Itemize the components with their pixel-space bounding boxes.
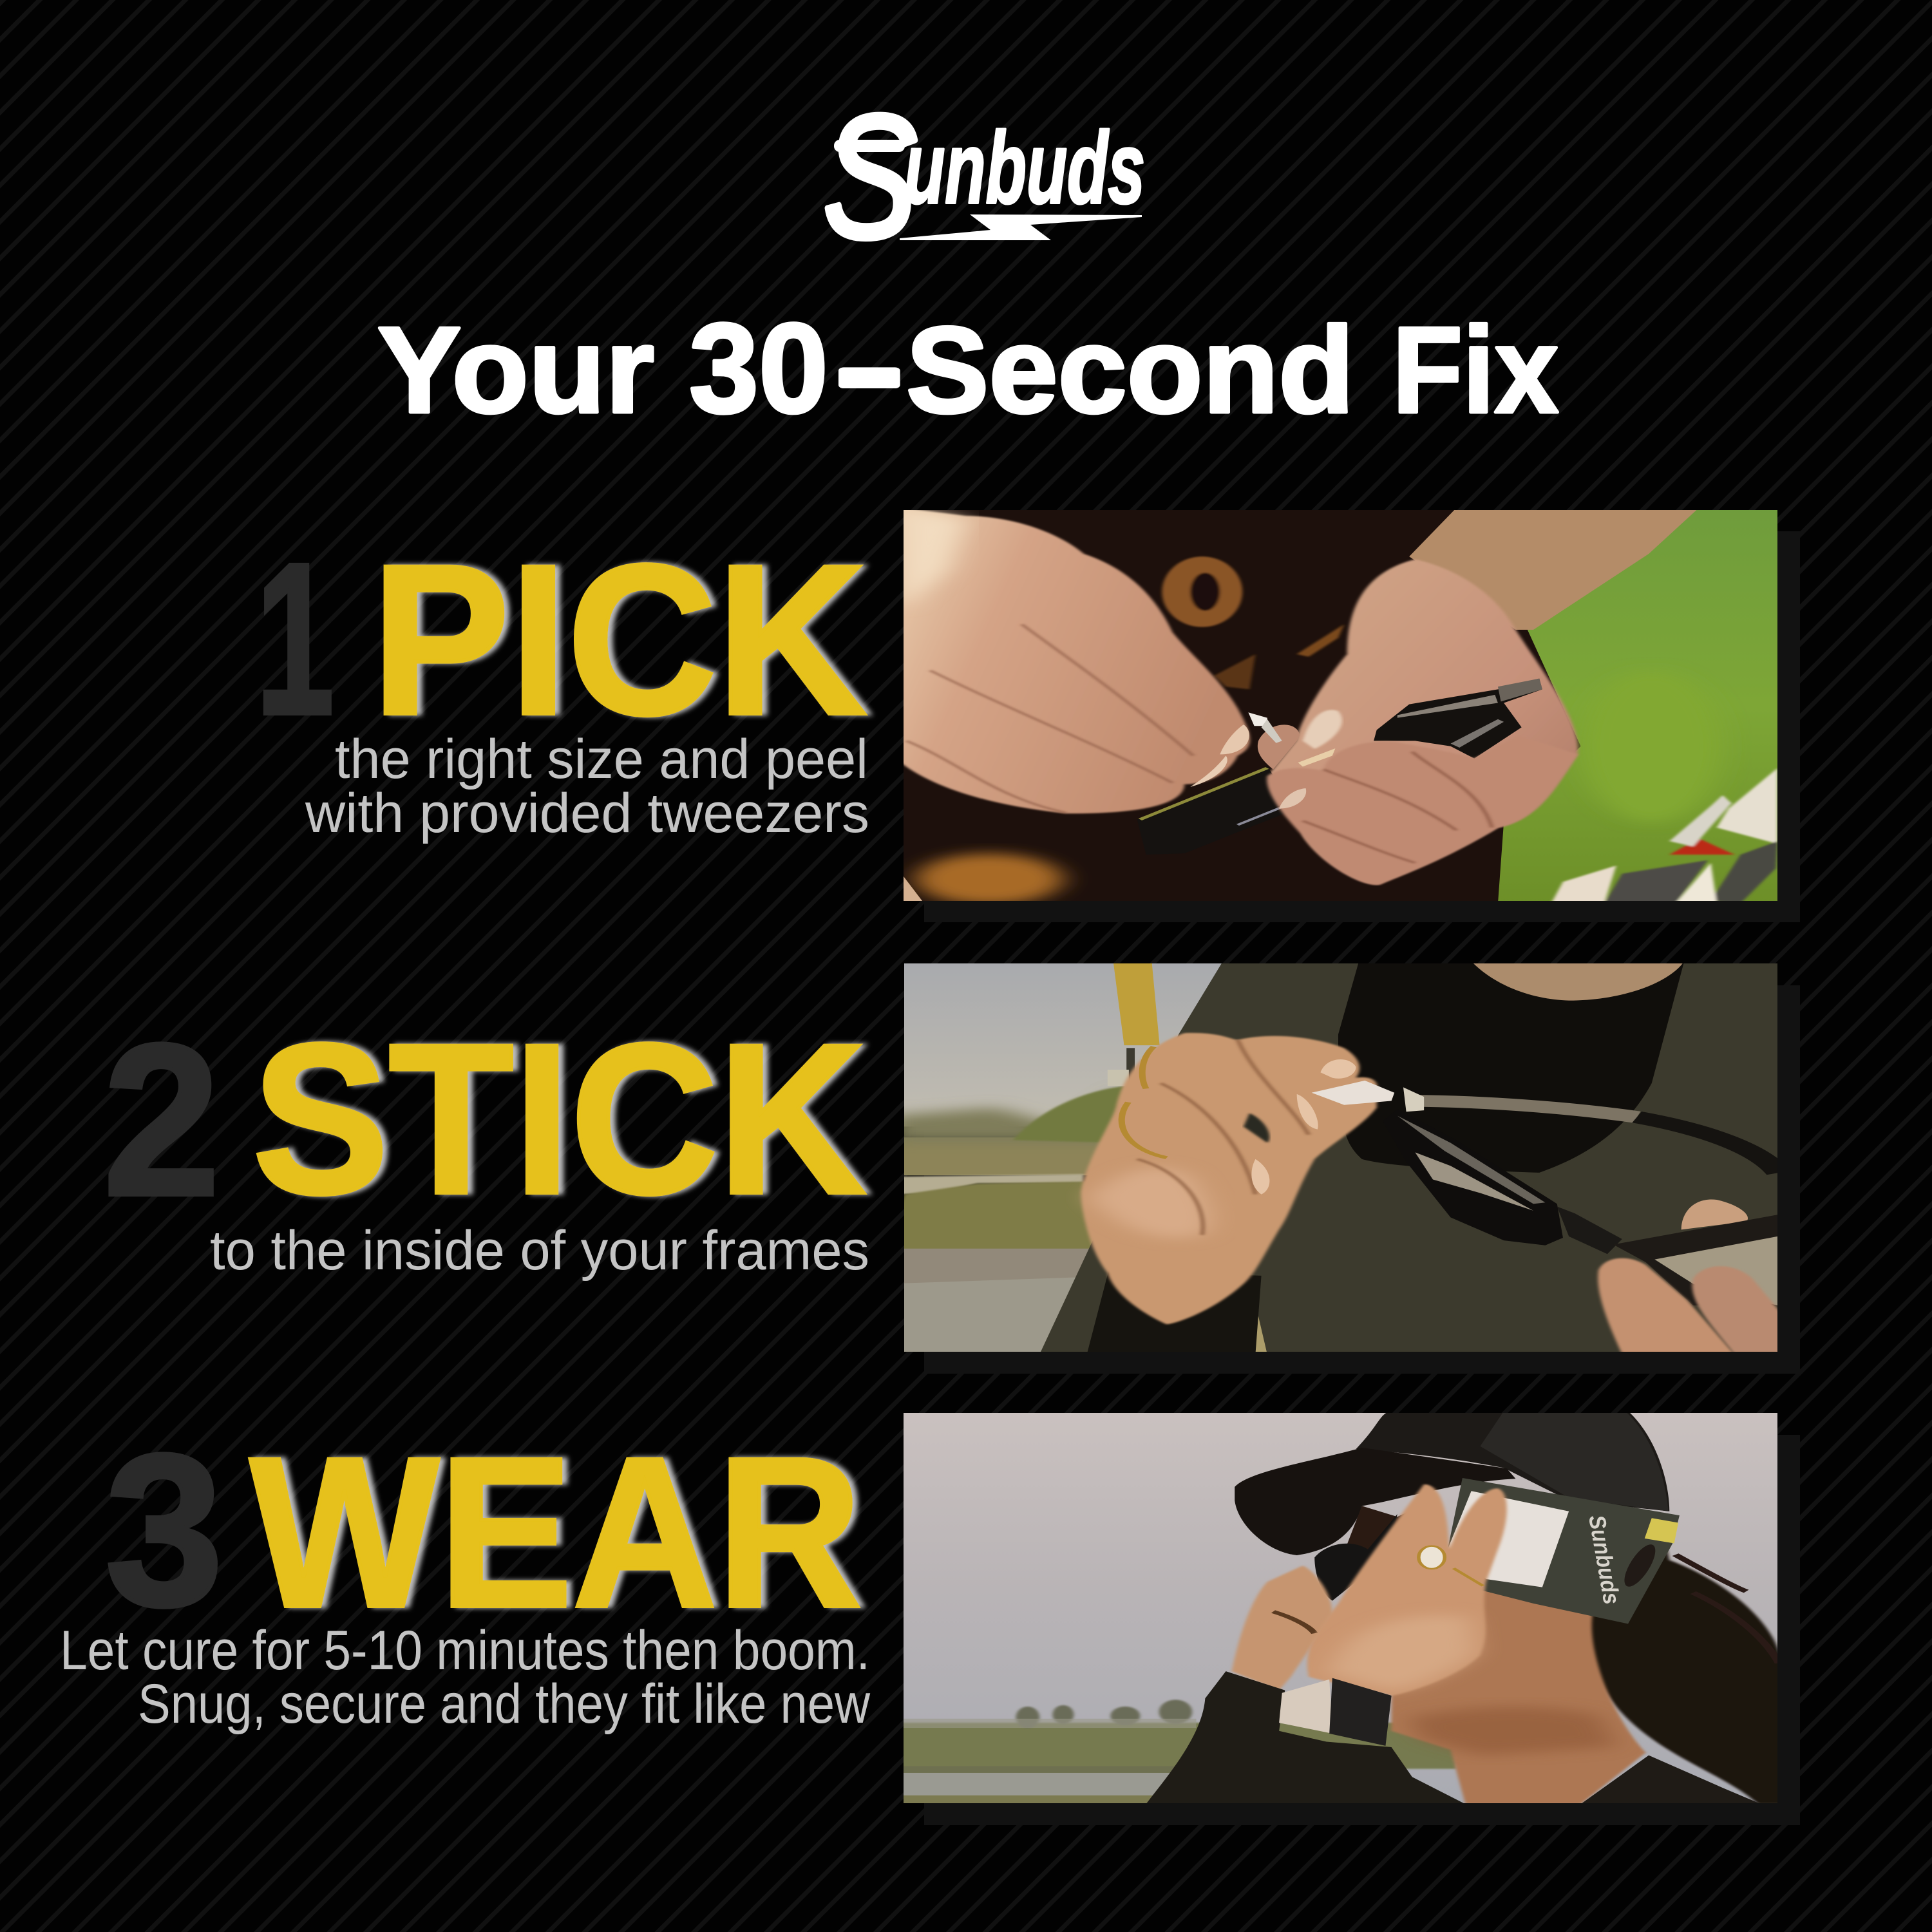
sand gap xyxy=(1256,1316,1267,1352)
title: 30 xyxy=(689,297,828,439)
frame lens xyxy=(1410,1166,1563,1245)
logo: Sunbuds wordmark: unbuds xyxy=(904,111,1145,225)
sign xyxy=(1113,963,1160,1045)
description 1: with provided tweezers xyxy=(305,782,869,844)
title: Fix xyxy=(1392,302,1558,439)
description 1 xyxy=(305,728,869,844)
step 1: heading and description xyxy=(256,518,869,844)
cap brim xyxy=(1235,1448,1516,1555)
shirt print xyxy=(1162,556,1344,689)
description 3: Let cure for 5-10 minutes then boom. xyxy=(60,1620,870,1681)
description 1: the right size and peel xyxy=(335,728,868,790)
package xyxy=(1448,1478,1680,1624)
package and fingers xyxy=(1681,1200,1748,1229)
temple xyxy=(1406,1101,1637,1117)
background objects xyxy=(1551,768,1777,904)
number 3: 3 xyxy=(105,1410,223,1651)
cap crown xyxy=(1356,1411,1669,1511)
neck and face xyxy=(1392,1587,1646,1804)
right hand fingers xyxy=(1267,735,1578,885)
rings xyxy=(1419,1546,1444,1569)
description 2: to the inside of your frames xyxy=(210,1220,869,1282)
photo 2: sticking pad to frames xyxy=(889,953,1800,1374)
sleeve xyxy=(1146,1671,1465,1804)
number 2: 2 xyxy=(103,999,220,1241)
title: - xyxy=(836,299,903,436)
hand xyxy=(1081,1033,1378,1325)
title: Your xyxy=(377,302,654,439)
left hand xyxy=(900,507,1250,813)
title xyxy=(377,297,1558,439)
step 3: heading and description xyxy=(60,1410,871,1735)
right hand back xyxy=(1267,559,1578,885)
heading WEAR: WEAR xyxy=(250,1413,862,1652)
logo: Sunbuds wordmark xyxy=(823,79,1145,274)
sleeve xyxy=(1087,1270,1262,1354)
white pad xyxy=(1312,1081,1394,1105)
rings xyxy=(1122,1046,1167,1158)
logo: Sunbuds wordmark: S xyxy=(823,79,917,274)
description 3 xyxy=(60,1620,871,1735)
description 3: Snug, secure and they fit like new xyxy=(138,1673,871,1735)
photo 3: woman wearing sunglasses xyxy=(889,1397,1816,1825)
title: Second xyxy=(906,302,1354,439)
watch xyxy=(1279,1680,1332,1734)
step 2: heading and description xyxy=(103,999,869,1282)
hair xyxy=(1584,1511,1782,1804)
shirt xyxy=(1039,961,1782,1354)
heading STICK: STICK xyxy=(252,999,866,1238)
front hand xyxy=(1307,1484,1507,1696)
package logo text: Sunbuds xyxy=(1584,1513,1625,1606)
photo 1: hands peeling pad xyxy=(889,502,1816,927)
back hand xyxy=(1232,1566,1332,1690)
number 1: 1 xyxy=(256,518,334,760)
heading PICK: PICK xyxy=(372,520,866,759)
sunglasses xyxy=(1374,679,1542,759)
white pad pieces xyxy=(1248,712,1267,726)
sunglasses xyxy=(1314,1514,1397,1601)
